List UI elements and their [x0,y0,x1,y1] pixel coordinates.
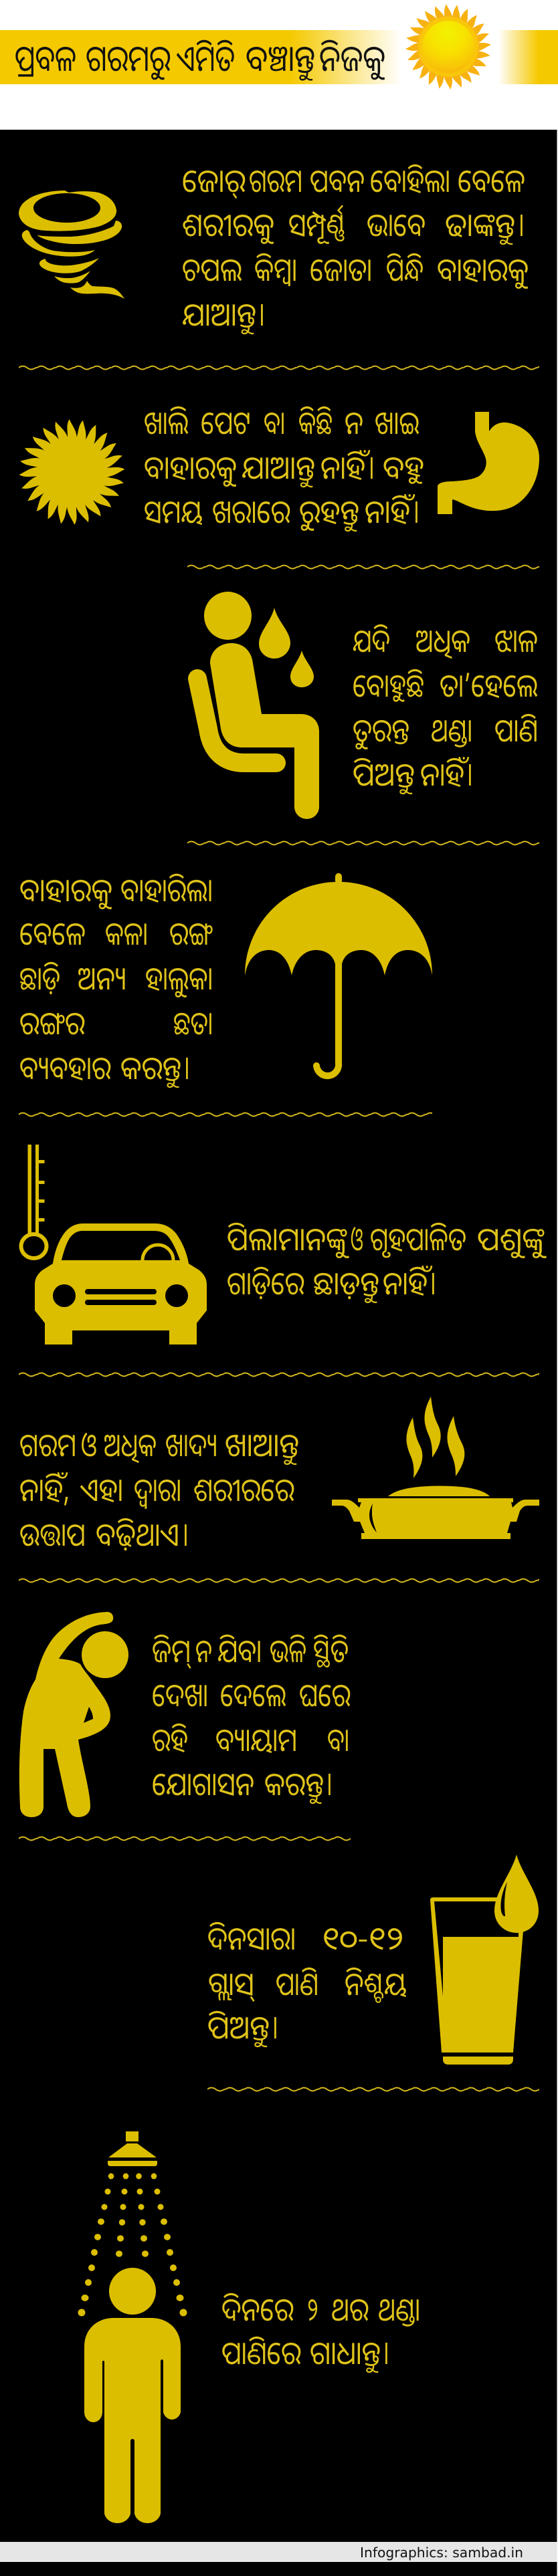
text block: hot food advice: ଖାଆନ୍ତୁ [225,1423,299,1466]
icon: stomach [438,412,539,514]
text block: clothing advice: ବେଳେ [458,158,525,202]
text block: sweat and cold water advice: ନାହିଁ [420,752,469,796]
text block: empty stomach advice [144,400,424,533]
icon: stretching person [19,1612,128,1817]
text block: hot food advice: ଏହା [80,1468,123,1511]
divider [207,2086,539,2093]
text block: empty stomach advice: | [413,498,420,523]
text block: clothing advice [182,158,529,336]
icon: tornado [19,191,124,299]
text block: umbrella advice: ଛତା [173,1001,213,1044]
text block: clothing advice: ଶରୀରକୁ [182,203,274,246]
text block: empty stomach advice: କିଛି [298,400,333,444]
text block: umbrella advice: | [184,1054,190,1080]
text block: empty stomach advice: ବା [264,400,285,444]
text block: drinking water advice: ପାଣି [276,1962,318,2005]
text block: empty stomach advice: ବାହାରକୁ [144,445,237,489]
text block: empty stomach advice: ଖାଇ [375,400,420,444]
text block: hot food advice: ଶରୀରରେ [193,1468,294,1511]
text block: clothing advice: ଜୋର୍ [182,158,246,202]
text block: exercise advice: ସ୍ଥିତି [313,1629,349,1672]
text block: umbrella advice: କରନ୍ତୁ [120,1046,181,1089]
text block: sweat and cold water advice: ପାଣି [494,708,538,751]
text block: clothing advice: ସମ୍ପୂର୍ଣ୍ଣ [288,203,345,246]
divider [19,364,539,371]
text block: clothing advice: | [519,211,525,237]
text block: clothing advice: ଜୋତା [310,247,372,291]
footer credit strip: Infographics: sambad.in [360,2545,523,2561]
text block: drinking water advice [207,1916,407,2048]
text block: clothing advice: ଭାବେ [367,203,426,246]
text block: clothing advice: ବୋହିଲା [370,158,450,202]
text block: clothing advice: ଗରମ [249,158,302,202]
text block: exercise advice: ବ୍ୟାୟାମ [215,1718,297,1761]
divider [187,840,539,846]
text block: drinking water advice: | [272,2014,278,2039]
text block: exercise advice: | [327,1770,333,1796]
text block: sweat and cold water advice: ଝାଳ [494,618,538,662]
text block: umbrella advice: ବାହାରକୁ [19,868,112,911]
text block: empty stomach advice: ନାହିଁ [320,445,370,489]
title [15,32,385,82]
text block: sweat and cold water advice [353,618,538,796]
icon: steaming pot [332,1397,539,1539]
text block: hot food advice: ଖାଦ୍ୟ [165,1423,217,1466]
text block: children in cars advice: ପିଲାମାନଙ୍କୁ [227,1217,350,1260]
text block: bathing advice: ଦିନରେ [221,2287,294,2331]
text block: empty stomach advice: ଯାଆନ୍ତୁ [242,445,315,489]
text block: drinking water advice: ପିଅନ୍ତୁ [207,2005,270,2048]
text block: exercise advice: ବା [327,1718,349,1761]
text block: umbrella advice: ବେଳେ [19,911,86,955]
text block: children in cars advice: ନାହିଁ [383,1261,432,1304]
text block: exercise advice: ଦେଲେ [220,1673,286,1716]
text block: clothing advice: ଚପଲ [182,247,242,291]
text block: clothing advice: ଢାଙ୍କନ୍ତୁ [445,203,515,246]
text block: children in cars advice: ଛାଡ଼ନ୍ତୁ [313,1261,379,1304]
text block: clothing advice: | [259,301,265,326]
text block: umbrella advice [19,868,213,1089]
text block: clothing advice: ପବନ [310,158,365,202]
text block: hot food advice: ଅଧିକ [104,1423,157,1466]
text block: exercise advice: ଘରେ [299,1673,351,1716]
icon: sweating seated person [197,592,319,819]
text block: empty stomach advice: | [369,454,375,479]
text block: umbrella advice: କଳା [105,911,148,955]
text block: children in cars advice: | [430,1270,436,1295]
text block: bathing advice: ଗାଧାନ୍ତୁ [310,2331,381,2374]
title: ନିଜକୁ [319,32,385,82]
text block: drinking water advice: ଦିନସାରା [207,1916,296,1960]
text block: children in cars advice [227,1217,547,1304]
icon: glass and water drop [430,1855,539,2065]
divider [19,1577,539,1584]
icon: car [35,1223,207,1344]
text block: clothing advice: ପିନ୍ଧି [386,247,424,291]
text block: empty stomach advice: ନ [345,400,363,444]
text block: empty stomach advice: ଖରାରେ [212,489,290,533]
text block: hot food advice: ଗରମ [19,1423,76,1466]
text block: hot food advice: ନାହିଁ, [19,1468,70,1511]
icon: umbrella [245,873,432,1076]
footer credit strip [0,2542,557,2562]
text block: umbrella advice: ରଙ୍ଗର [19,1001,85,1044]
text block: clothing advice: ବାହାରକୁ [437,247,529,291]
text block: hot food advice: ଓ [81,1423,97,1466]
text block: sweat and cold water advice: ଯଦି [353,618,390,662]
text block: exercise advice: ଦେଖା [152,1673,208,1716]
text block: empty stomach advice: ଖାଲି [144,400,189,444]
title: ଏମିତି [176,32,235,82]
icon: sun silhouette [19,419,125,525]
text block: children in cars advice: ଗାଡ଼ିରେ [227,1261,304,1304]
divider [19,1371,539,1378]
text block: umbrella advice: ବାହାରିଲା [120,868,213,911]
icon: standing person [84,2268,181,2523]
text block: exercise advice: ଜିମ୍ [152,1629,191,1672]
text block: bathing advice: ୨ [307,2287,318,2331]
text block: sweat and cold water advice: | [467,761,473,786]
text block: sweat and cold water advice: ତୁରନ୍ତ [353,708,409,751]
text block: hot food advice: ଉତ୍ତାପ [19,1512,86,1556]
text block: bathing advice: | [383,2339,389,2365]
text block: umbrella advice: ରଙ୍ଗ [169,911,213,955]
text block: children in cars advice: ପଶୁଙ୍କୁ [477,1217,547,1260]
text block: umbrella advice: ହାଲୁକା [145,956,213,1000]
text block: exercise advice: ଭଳି [270,1629,306,1672]
title: ପ୍ରବଳ [15,32,76,82]
header band [0,30,558,84]
text block: umbrella advice: ଛାଡ଼ି [19,956,60,1000]
text block: clothing advice: ଯାଆନ୍ତୁ [182,292,256,336]
text block: children in cars advice: ଗୃହପାଳିତ [370,1217,466,1260]
text block: drinking water advice: ଗ୍ଲାସ୍ [208,1962,255,2005]
text block: hot food advice: ଦ୍ୱାରା [134,1468,181,1511]
title: ବଞ୍ଚାନ୍ତୁ [246,32,315,82]
text block: hot food advice: | [183,1521,189,1546]
text block: sweat and cold water advice: ବୋହୁଛି [353,663,424,707]
text block: exercise advice: ଯିବା [217,1629,262,1672]
text block: empty stomach advice: ରୁହନ୍ତୁ [299,489,359,533]
text block: drinking water advice: ୧୦-୧୨ [322,1916,404,1960]
text block: sweat and cold water advice: ଅଧିକ [415,618,470,662]
text block: clothing advice: କିମ୍ବା [254,247,297,291]
divider [187,564,539,570]
divider [19,1111,432,1118]
text block: exercise advice [152,1629,351,1805]
text block: hot food advice: ବଢ଼ିଥାଏ [96,1512,179,1556]
text block: empty stomach advice: ବହୁ [383,445,424,489]
text block: exercise advice: କରନ୍ତୁ [264,1762,324,1805]
text block: bathing advice: ଥର [331,2287,369,2331]
text block: empty stomach advice: ପେଟ [201,400,251,444]
icon: header sun [405,4,491,90]
text block: drinking water advice: ନିଶ୍ଚୟ [345,1962,407,2005]
text block: exercise advice: ନ [195,1629,212,1672]
icon: thermometer [21,1145,47,1258]
text block: bathing advice [221,2287,420,2374]
text block: exercise advice: ଯୋଗାସନ [152,1762,254,1805]
text block: umbrella advice: ବ୍ୟବହାର [19,1046,111,1089]
text block: exercise advice: ରହି [152,1718,188,1761]
title: ଗରମରୁ [86,32,171,82]
text block: empty stomach advice: ସମୟ [144,489,203,533]
text block: sweat and cold water advice: ପିଅନ୍ତୁ [353,752,415,796]
text block: bathing advice: ପାଣିରେ [221,2331,301,2374]
text block: sweat and cold water advice: ଥଣ୍ଡା [431,708,472,751]
text block: empty stomach advice: ନାହିଁ [365,489,415,533]
divider [19,1835,351,1842]
text block: children in cars advice: ଓ [351,1217,363,1260]
text block: umbrella advice: ଅନ୍ୟ [78,956,126,1000]
text block: hot food advice [19,1423,299,1556]
icon: shower head with falling water [78,2131,187,2316]
text block: bathing advice: ଥଣ୍ଡା [378,2287,420,2331]
